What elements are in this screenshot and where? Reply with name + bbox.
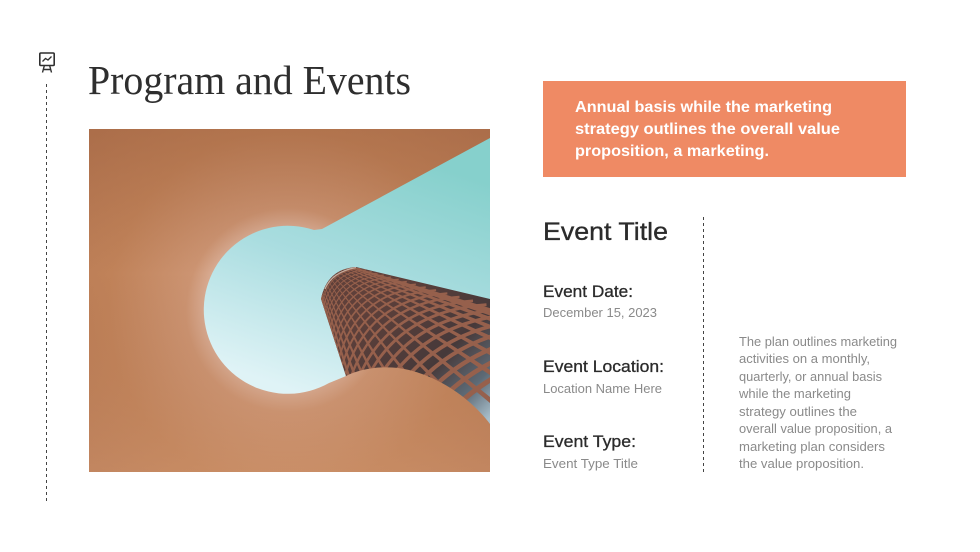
event type [543,433,638,471]
heading: event title: Event Title [543,218,668,246]
text block: description: activities on a monthly, [739,351,870,366]
callout: orange statement box [543,81,906,177]
event date: December 15, 2023 [543,305,657,320]
title: Program and Events [88,57,411,103]
event date [543,283,657,320]
timeline dashed line [46,84,48,501]
event location: Location Name Here [543,381,662,396]
text block: description: The plan outlines marketing [739,334,897,349]
text block: description: quarterly, or annual basis [739,369,882,384]
text block: description [738,334,897,471]
event type: Event Type Title [543,456,638,471]
text block: description: while the marketing [738,386,851,401]
text block: description: overall value proposition, a [739,421,893,436]
text block: description: marketing plan considers [739,439,885,454]
photo: looking up at a tower through a curved wall [89,129,490,472]
event date: Event Date: [543,283,633,301]
callout: orange statement box: proposition, a marketing. [575,143,769,160]
column dashed divider [702,217,704,473]
event location [543,358,664,396]
text block: description: strategy outlines the [739,404,857,419]
callout: orange statement box: Annual basis while the marketing [575,99,832,116]
text block: description: the value proposition. [739,456,864,471]
icon: presentation board [40,53,54,72]
event type: Event Type: [543,433,636,451]
event location: Event Location: [543,358,664,376]
callout: orange statement box: strategy outlines the overall value [575,121,840,138]
